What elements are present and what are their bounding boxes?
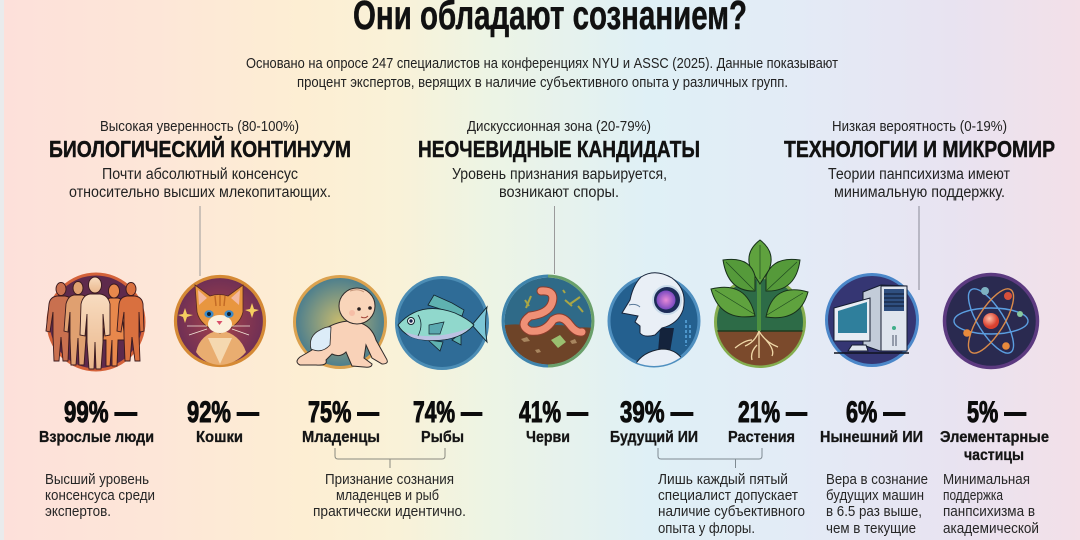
icon: worm [500,276,600,370]
stat: babies [302,396,380,446]
icon: fish [396,278,488,368]
icon: future AI [609,273,699,372]
stat: future AI: 39% — [620,396,693,429]
panel: discussion zone header: Уровень признания варьируется, [452,166,667,183]
panel: low probability header: минимальную поддержку. [834,184,1005,201]
panel: discussion zone header: НЕОЧЕВИДНЫЕ КАНДИДАТЫ [418,136,700,162]
panel: discussion zone header: Дискуссионная зона (20-79%) [467,119,651,135]
note: particles: Минимальная [943,471,1030,488]
icon: plant [711,240,808,371]
note: plants: опыта у флоры. [658,520,755,537]
stat: fish: Рыбы [421,429,464,446]
stat: worms: 41% — [519,396,588,429]
stat: current AI [820,396,923,446]
bracket: babies and fish [335,448,445,468]
stat: adults [39,396,154,446]
note: current AI [826,471,928,540]
stat: worms [519,396,588,446]
stat: babies: Младенцы [302,429,380,446]
note: adults: Высший уровень [45,471,149,488]
panel: high confidence header [49,119,351,201]
panel: high confidence header: относительно высших млекопитающих. [69,184,331,201]
note: particles: поддержка [943,487,1004,504]
panel: high confidence header: Почти абсолютный консенсус [102,166,298,183]
icon: elementary particles [944,274,1038,368]
panel: discussion zone header: возникают споры. [499,184,619,201]
stat: cats [187,396,259,446]
note: adults [45,471,155,520]
stat: fish: 74% — [413,396,482,429]
icon: cat [176,276,264,366]
note: babies and fish: Признание сознания [325,471,454,488]
icon: current AI computer [826,274,918,366]
stat: worms: Черви [526,429,570,446]
note: current AI: Вера в сознание [826,471,928,488]
stat: plants [728,396,807,446]
stat: current AI: Нынешний ИИ [820,429,923,446]
stat: adults: 99% — [64,396,137,429]
stat: cats: 92% — [187,396,259,429]
stat: current AI: 6% — [846,396,905,429]
note: babies and fish: младенцев и рыб [336,487,439,504]
stat: elementary particles: Элементарные [940,429,1049,446]
bracket: future AI and plants [658,448,762,468]
subtitle: процент экспертов, верящих в наличие субъективного опыта у различных групп. [297,75,788,91]
stat: fish [413,396,482,446]
panel: high confidence header: БИОЛОГИЧЕСКИЙ КОНТИНУУМ [49,135,351,162]
note: current AI: чем в текущие [826,520,916,537]
note: adults: консенсуса среди [45,487,155,504]
panel: low probability header: Теории панпсихизма имеют [828,166,1010,183]
panel: discussion zone header [418,119,700,201]
note: current AI: в 6.5 раз выше, [826,503,922,520]
stat: plants: 21% — [738,396,807,429]
panel: low probability header [784,119,1055,201]
icon: baby [294,276,387,368]
note: current AI: будущих машин [826,487,924,504]
stat: future AI: Будущий ИИ [610,429,698,446]
stat: plants: Растения [728,429,795,446]
note: babies and fish: практически идентично. [313,503,466,520]
stat: elementary particles [940,396,1049,464]
stat: adults: Взрослые люди [39,429,154,446]
note: adults: экспертов. [45,503,111,520]
panel: high confidence header: Высокая уверенность (80-100%) [100,119,299,135]
icon: adults [46,274,144,370]
note: plants [658,471,805,537]
stat: cats: Кошки [196,429,243,446]
panel: low probability header: Низкая вероятность (0-19%) [832,119,1007,135]
stat: babies: 75% — [308,396,379,429]
note: particles: панпсихизма в [943,503,1035,520]
stat: future AI [610,396,698,446]
note: babies and fish [313,471,466,520]
note: plants: Лишь каждый пятый [658,471,788,488]
note: particles: академической [943,520,1039,537]
stat: elementary particles: 5% — [967,396,1026,429]
note: particles [943,471,1039,540]
note: plants: специалист допускает [658,487,798,504]
subtitle: Основано на опросе 247 специалистов на конференциях NYU и ASSC (2025). Данные показывают [246,56,838,72]
stat: elementary particles: частицы [964,447,1024,464]
note: plants: наличие субъективного [658,503,805,520]
subtitle [246,56,838,91]
